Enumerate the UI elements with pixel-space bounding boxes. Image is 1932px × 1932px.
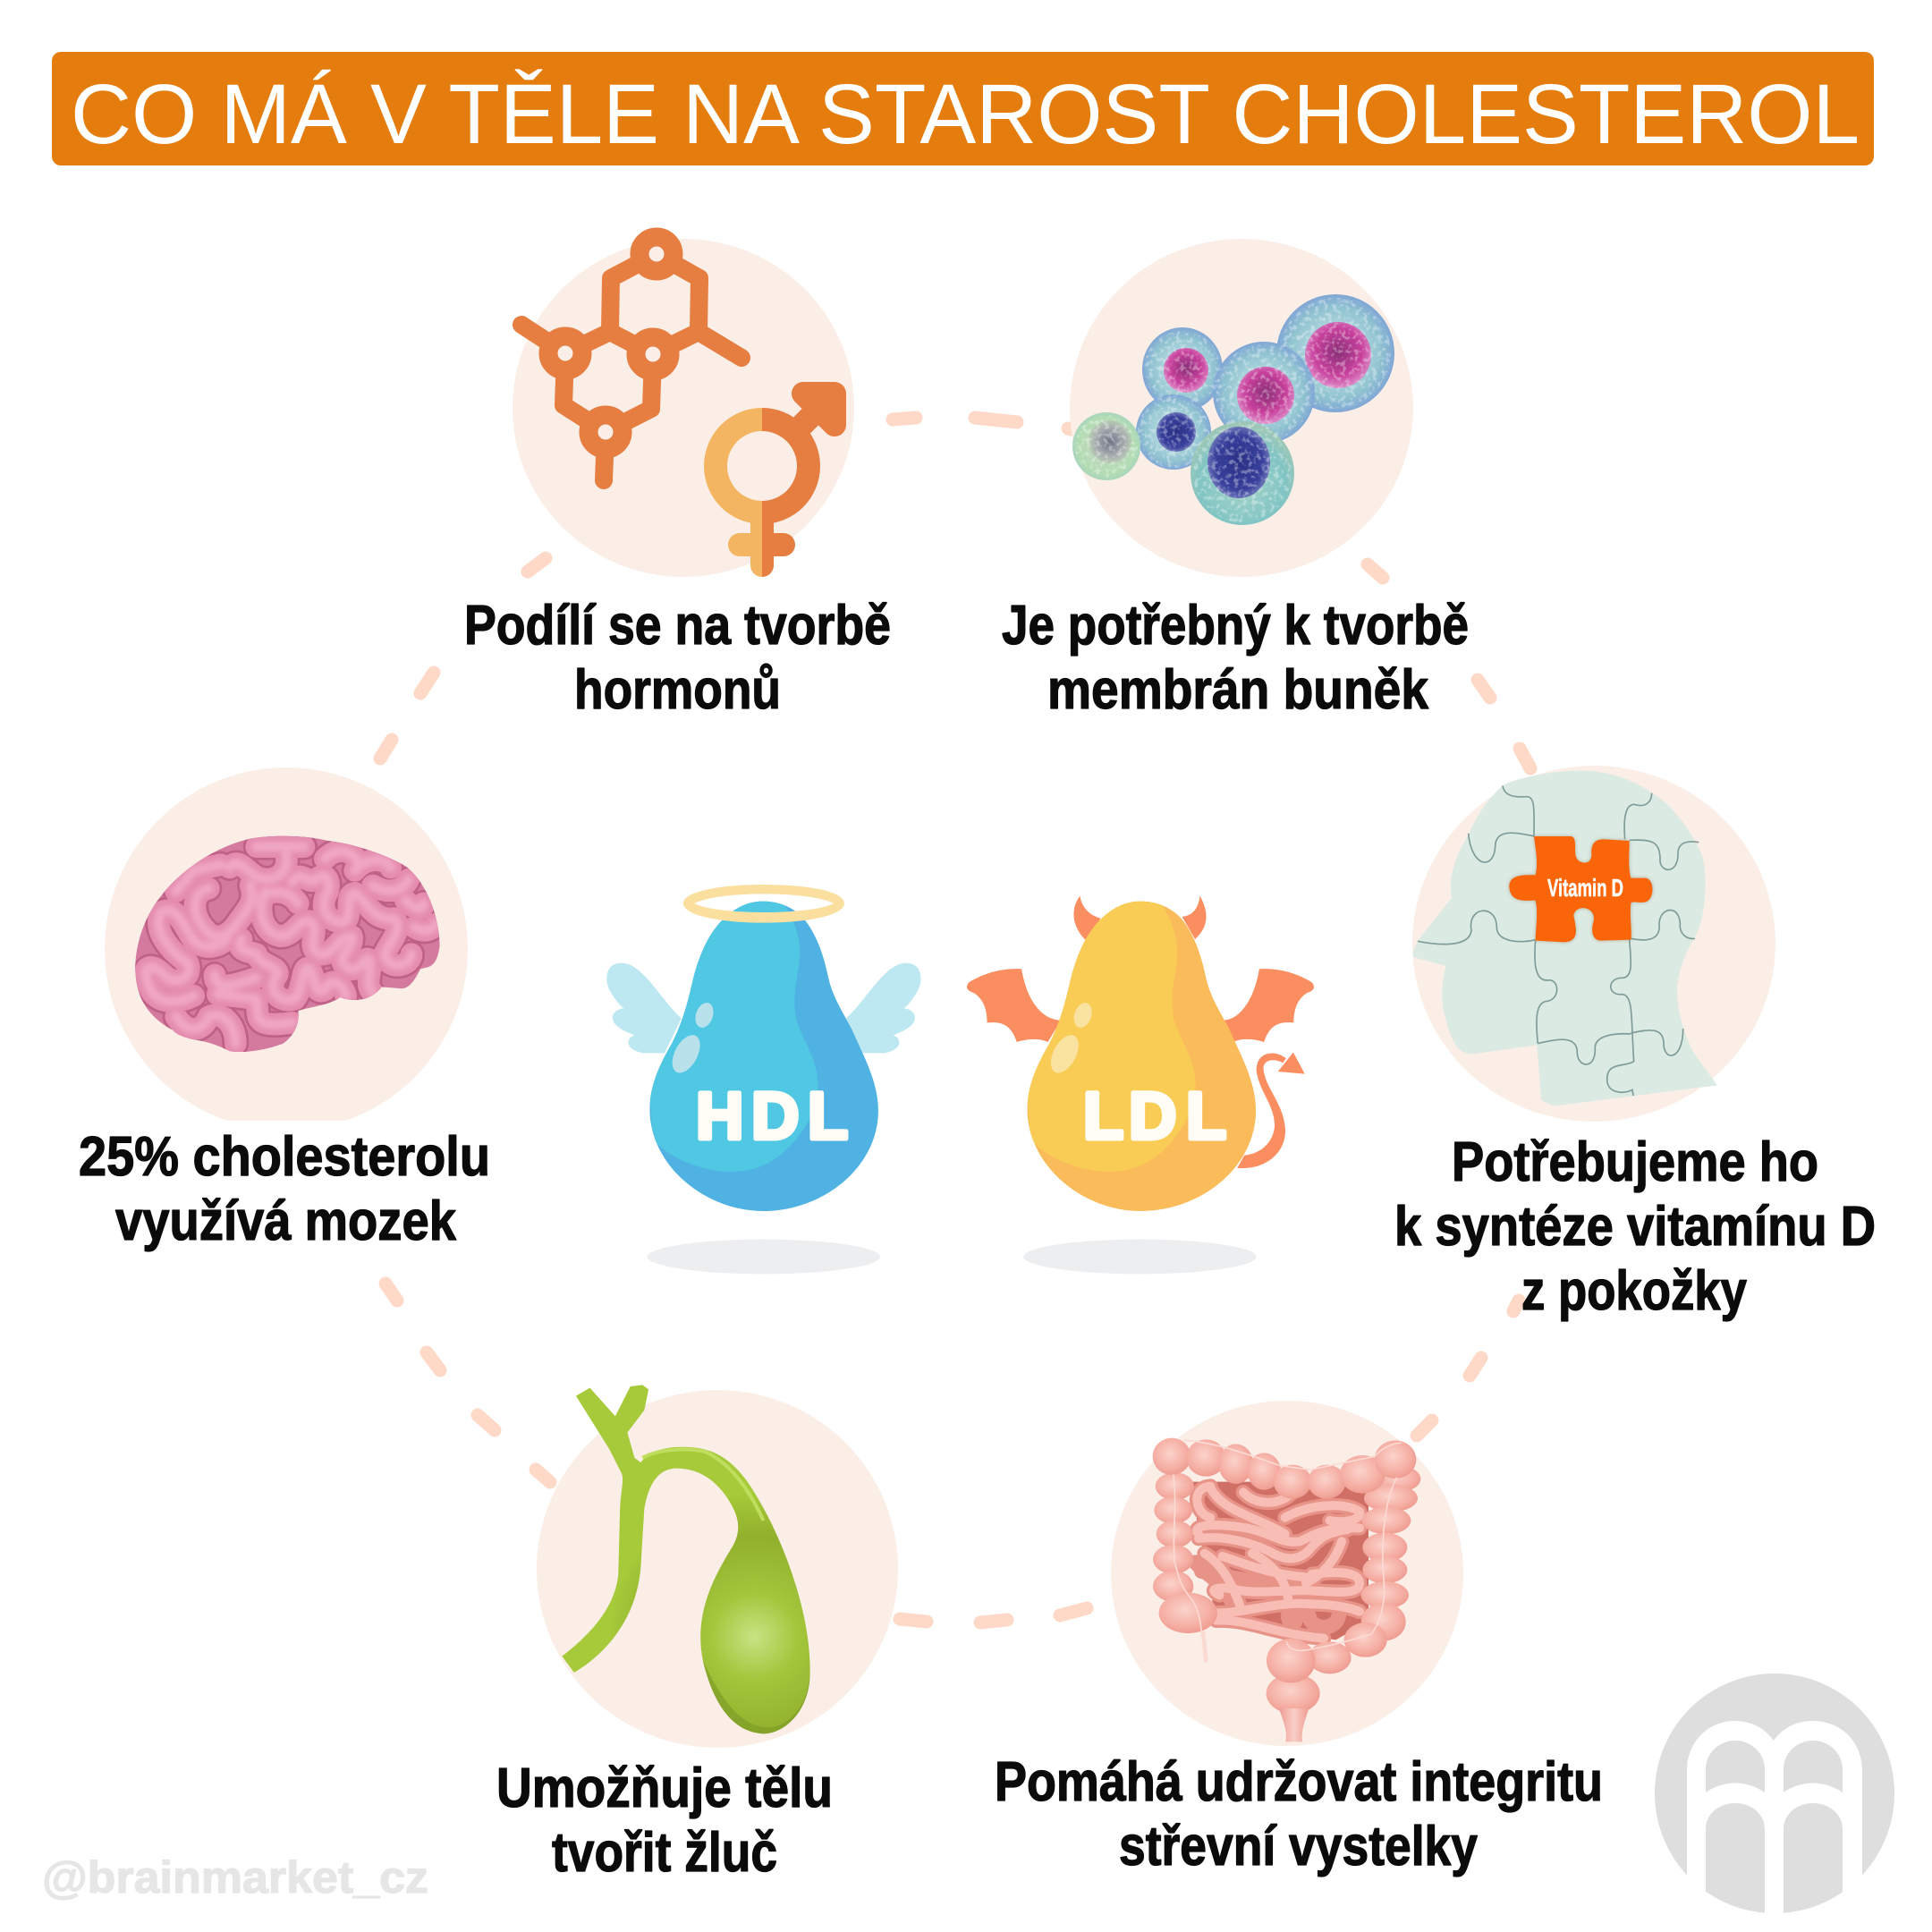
- devil horns, wings and tail: [967, 896, 1314, 1168]
- dashed cycle ring: [380, 418, 1530, 1623]
- panel: intestine: [995, 1401, 1603, 1877]
- icon: gallbladder: [562, 1385, 810, 1733]
- caption: cells: Je potřebný k tvorbě: [1002, 595, 1469, 657]
- panel: hormones: [464, 237, 891, 721]
- label: HDL: HDL: [696, 1079, 848, 1153]
- caption: brain: [79, 1126, 490, 1252]
- body: HDL: [649, 902, 878, 1211]
- icon: cells: [1072, 294, 1394, 525]
- caption: intestine: [995, 1751, 1603, 1877]
- illustration: LDL character: [967, 896, 1314, 1274]
- title banner: CO MÁ V TĚLE NA STAROST CHOLESTEROL: [71, 67, 1860, 162]
- caption: intestine: Pomáhá udržovat integritu: [995, 1751, 1603, 1813]
- caption: vitamin D: z pokožky: [1521, 1260, 1747, 1322]
- panel: vitamin D: [1394, 766, 1876, 1322]
- caption: cells: [1002, 595, 1469, 721]
- panel: brain: [79, 767, 490, 1252]
- watermark handle: @brainmarket_cz: [42, 1852, 428, 1902]
- label: Vitamin D: Vitamin D: [1547, 874, 1623, 902]
- shadow: LDL: [1023, 1240, 1257, 1274]
- background circle: intestine: [1111, 1401, 1463, 1746]
- caption: gallbladder: [496, 1758, 833, 1884]
- body: LDL: [1027, 902, 1256, 1211]
- caption: hormones: [464, 595, 891, 721]
- background circle: brain: [105, 767, 468, 1131]
- shadow: HDL: [648, 1240, 880, 1274]
- icon: steroid molecule: [521, 237, 741, 480]
- highlights: HDL: [667, 1002, 716, 1074]
- background circle: hormones: [513, 239, 854, 577]
- panel: gallbladder: [496, 1385, 898, 1884]
- background circle: cells: [1070, 239, 1413, 577]
- logo: brainmarket: [1655, 1674, 1894, 1914]
- panel: cell membranes: [1002, 239, 1469, 721]
- icon: gender symbol: [704, 394, 835, 577]
- label: LDL: LDL: [1083, 1079, 1226, 1153]
- background circle: gallbladder: [537, 1390, 898, 1748]
- illustration: HDL character: [606, 885, 921, 1274]
- caption: hormones: hormonů: [574, 659, 781, 721]
- caption: brain: využívá mozek: [115, 1191, 456, 1252]
- caption: vitamin D: k syntéze vitamínu D: [1394, 1196, 1876, 1258]
- highlights: LDL: [1046, 1002, 1094, 1074]
- caption: cells: membrán buněk: [1047, 659, 1428, 721]
- wings: HDL: [606, 963, 921, 1053]
- caption: gallbladder: tvořit žluč: [552, 1822, 777, 1884]
- caption: intestine: střevní vystelky: [1119, 1816, 1478, 1877]
- icon: intestines: [1153, 1438, 1420, 1741]
- caption: vitamin D: [1394, 1131, 1876, 1322]
- icon: brain: [131, 832, 445, 1055]
- caption: brain: 25% cholesterolu: [79, 1126, 490, 1188]
- caption: gallbladder: Umožňuje tělu: [496, 1758, 833, 1819]
- caption: hormones: Podílí se na tvorbě: [464, 595, 891, 657]
- halo: [683, 885, 844, 923]
- icon: puzzle head: [1413, 770, 1717, 1106]
- background circle: vitamin D: [1412, 766, 1775, 1122]
- caption: vitamin D: Potřebujeme ho: [1452, 1131, 1818, 1193]
